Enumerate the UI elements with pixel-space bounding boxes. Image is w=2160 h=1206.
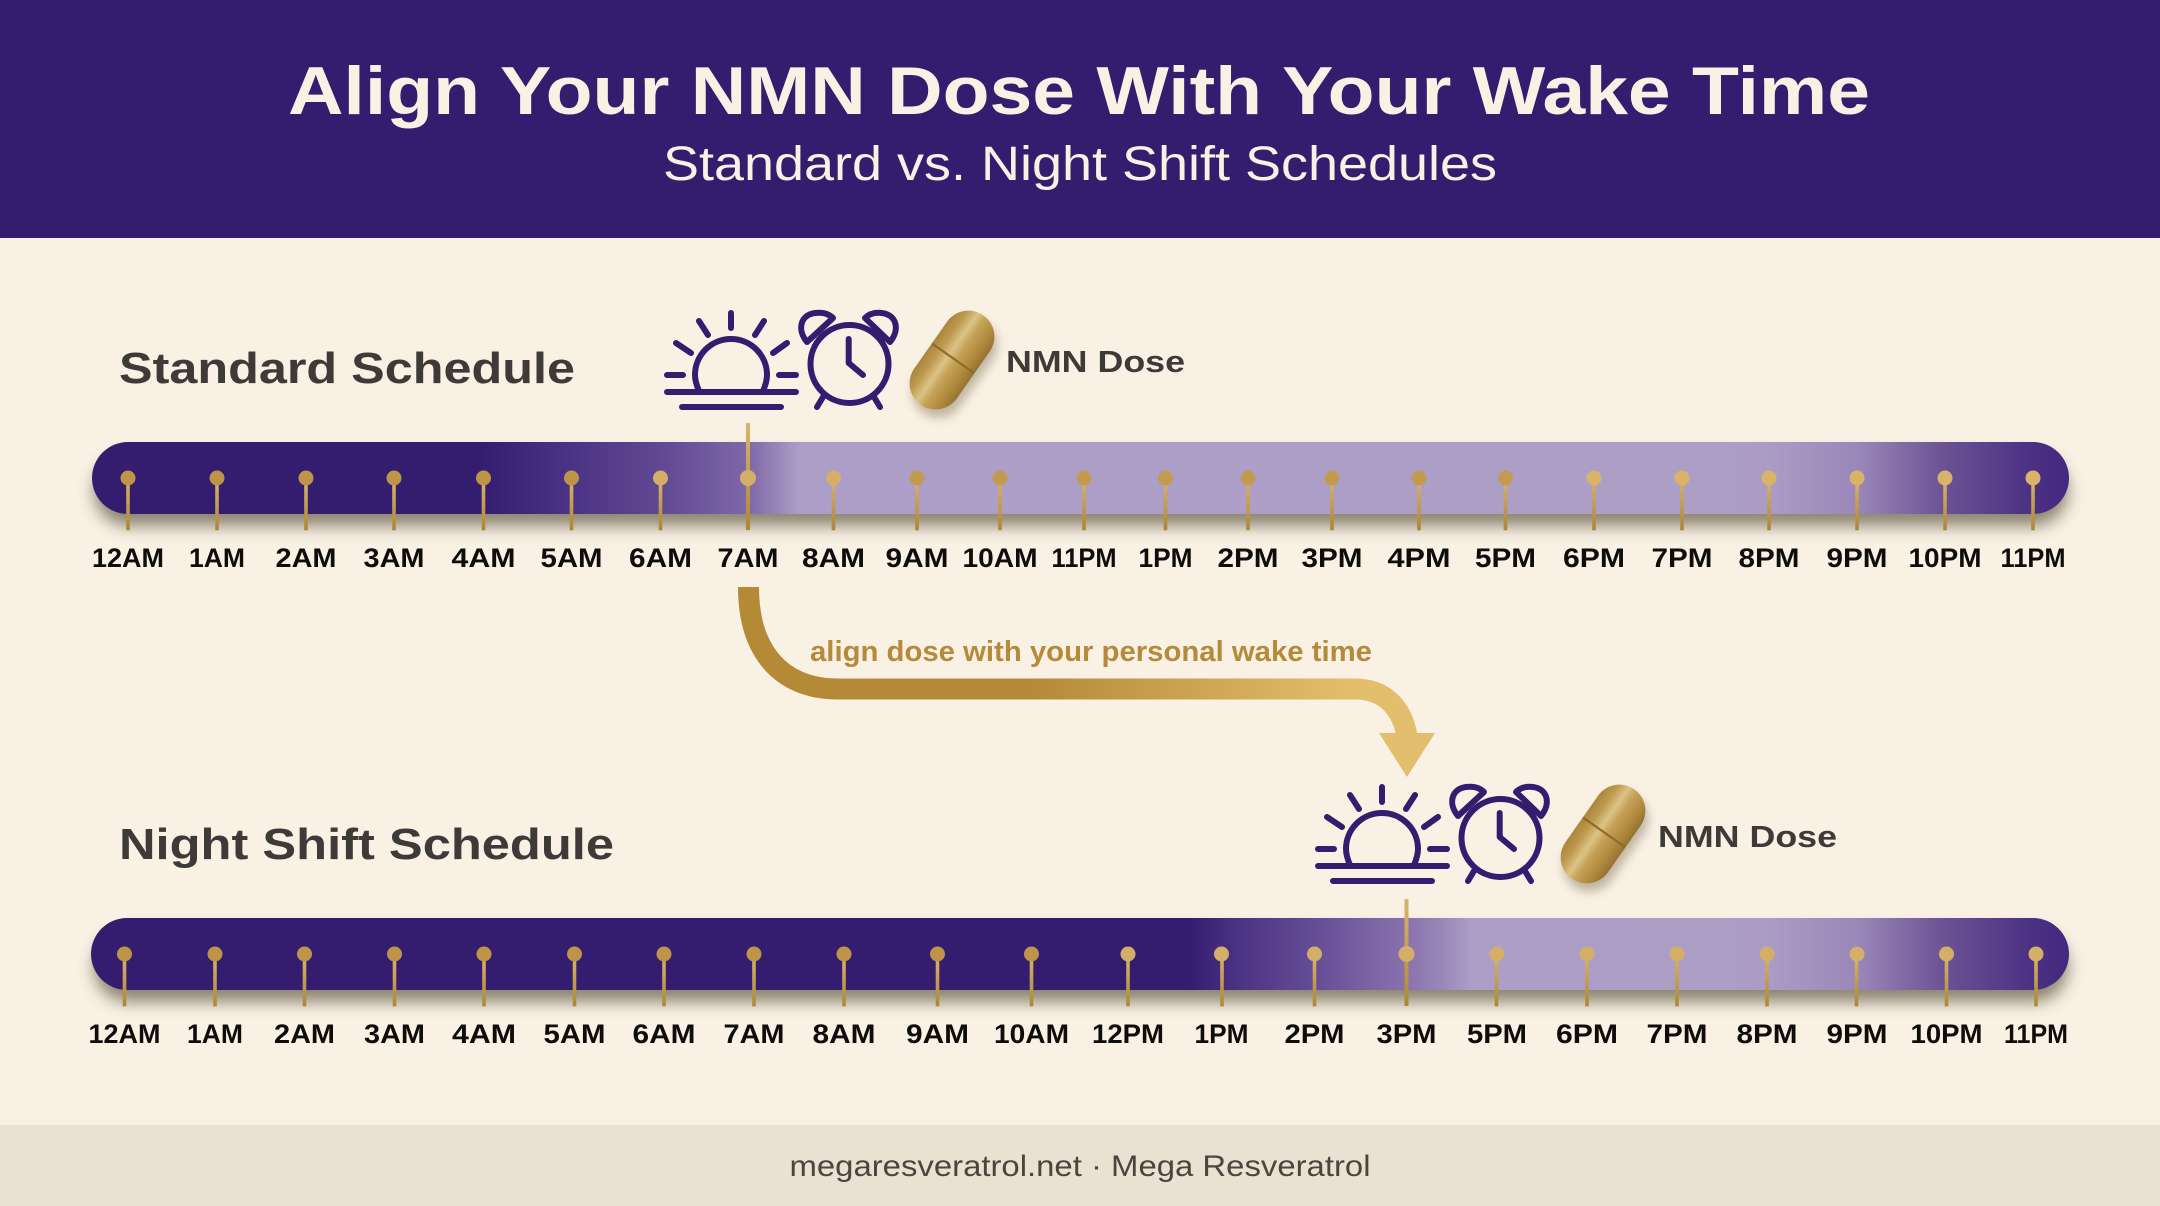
hour labels: night shift schedule: 4AM <box>452 1019 516 1049</box>
icon: alarm clock <box>801 313 896 407</box>
footer band <box>0 1125 2160 1206</box>
hour labels: standard schedule: 4PM <box>1388 543 1450 573</box>
icon: sunrise <box>667 313 796 407</box>
hour labels: night shift schedule: 1PM <box>1194 1019 1248 1049</box>
hour labels: night shift schedule: 3AM <box>364 1019 425 1049</box>
arrow label: align dose with your personal wake time <box>810 636 1372 668</box>
hour labels: standard schedule: 11PM <box>1052 543 1116 573</box>
hour labels: standard schedule: 8PM <box>1738 543 1800 573</box>
header band <box>0 0 2160 238</box>
wake time and dose icons: standard <box>667 300 1007 428</box>
hour labels: standard schedule: 9PM <box>1826 543 1888 573</box>
timeline: standard schedule <box>92 423 2069 530</box>
hour labels: standard schedule: 11PM <box>2000 543 2066 573</box>
wake marker: 3PM <box>1404 899 1408 1006</box>
hour labels: night shift schedule: 2AM <box>274 1019 335 1049</box>
footer text: megaresveratrol.net · Mega Resveratrol <box>790 1150 1370 1183</box>
hour labels: night shift schedule: 6AM <box>632 1019 696 1049</box>
hour labels: standard schedule: 8AM <box>802 543 865 573</box>
label: NMN dose (standard): NMN Dose <box>1006 344 1185 379</box>
hour labels: night shift schedule: 5PM <box>1467 1019 1527 1049</box>
hour labels: standard schedule: 2AM <box>276 543 336 573</box>
wake marker: 7AM <box>746 423 750 530</box>
hour labels: night shift schedule: 9AM <box>906 1019 969 1049</box>
hour labels: standard schedule: 2PM <box>1218 543 1278 573</box>
hour labels: standard schedule: 6AM <box>629 543 692 573</box>
hour labels: standard schedule: 4AM <box>452 543 516 573</box>
hour labels: night shift schedule: 12AM <box>88 1019 160 1049</box>
hour labels: night shift schedule: 7PM <box>1646 1019 1708 1049</box>
arrow: shift from standard to night schedule <box>748 587 1435 777</box>
hour labels: standard schedule: 5AM <box>540 543 602 573</box>
hour labels: standard schedule: 3PM <box>1302 543 1362 573</box>
hour labels: night shift schedule: 9PM <box>1826 1019 1888 1049</box>
heading: night shift schedule: Night Shift Schedule <box>119 820 614 869</box>
hour labels: standard schedule: 1AM <box>189 543 245 573</box>
hour labels: night shift schedule: 8AM <box>812 1019 876 1049</box>
hour labels: standard schedule: 1PM <box>1138 543 1192 573</box>
timeline: night shift schedule <box>91 899 2069 1006</box>
hour labels: night shift schedule: 11PM <box>2004 1019 2068 1049</box>
icon: sunrise <box>1318 787 1447 881</box>
hour labels: night shift schedule: 6PM <box>1556 1019 1618 1049</box>
hour labels: night shift schedule: 2PM <box>1284 1019 1344 1049</box>
hour labels: standard schedule: 5PM <box>1475 543 1536 573</box>
hour labels: night shift schedule: 10PM <box>1910 1019 1982 1049</box>
hour labels: standard schedule: 3AM <box>364 543 424 573</box>
title: Align Your NMN Dose With Your Wake Time <box>288 53 1870 129</box>
hour labels: standard schedule: 12AM <box>92 543 164 573</box>
hour labels: standard schedule <box>92 543 2066 573</box>
icon: alarm clock <box>1452 787 1547 881</box>
hour labels: standard schedule: 7AM <box>718 543 778 573</box>
icon: gold capsule <box>899 300 1007 428</box>
hour labels: standard schedule: 9AM <box>886 543 948 573</box>
hour labels: night shift schedule: 1AM <box>187 1019 243 1049</box>
hour labels: night shift schedule <box>88 1019 2068 1049</box>
hour labels: standard schedule: 10PM <box>1908 543 1982 573</box>
label: NMN dose (night shift): NMN Dose <box>1658 819 1837 854</box>
subtitle: Standard vs. Night Shift Schedules <box>663 138 1497 191</box>
wake time and dose icons: night shift <box>1318 774 1658 902</box>
hour labels: night shift schedule: 10AM <box>994 1019 1069 1049</box>
hour labels: night shift schedule: 8PM <box>1736 1019 1798 1049</box>
heading: standard schedule: Standard Schedule <box>119 344 575 393</box>
icon: gold capsule <box>1550 774 1658 902</box>
hour labels: standard schedule: 6PM <box>1563 543 1625 573</box>
hour labels: standard schedule: 7PM <box>1652 543 1712 573</box>
hour labels: night shift schedule: 7AM <box>724 1019 784 1049</box>
hour labels: standard schedule: 10AM <box>962 543 1038 573</box>
hour labels: night shift schedule: 12PM <box>1092 1019 1164 1049</box>
hour labels: night shift schedule: 5AM <box>544 1019 606 1049</box>
hour labels: night shift schedule: 3PM <box>1376 1019 1436 1049</box>
